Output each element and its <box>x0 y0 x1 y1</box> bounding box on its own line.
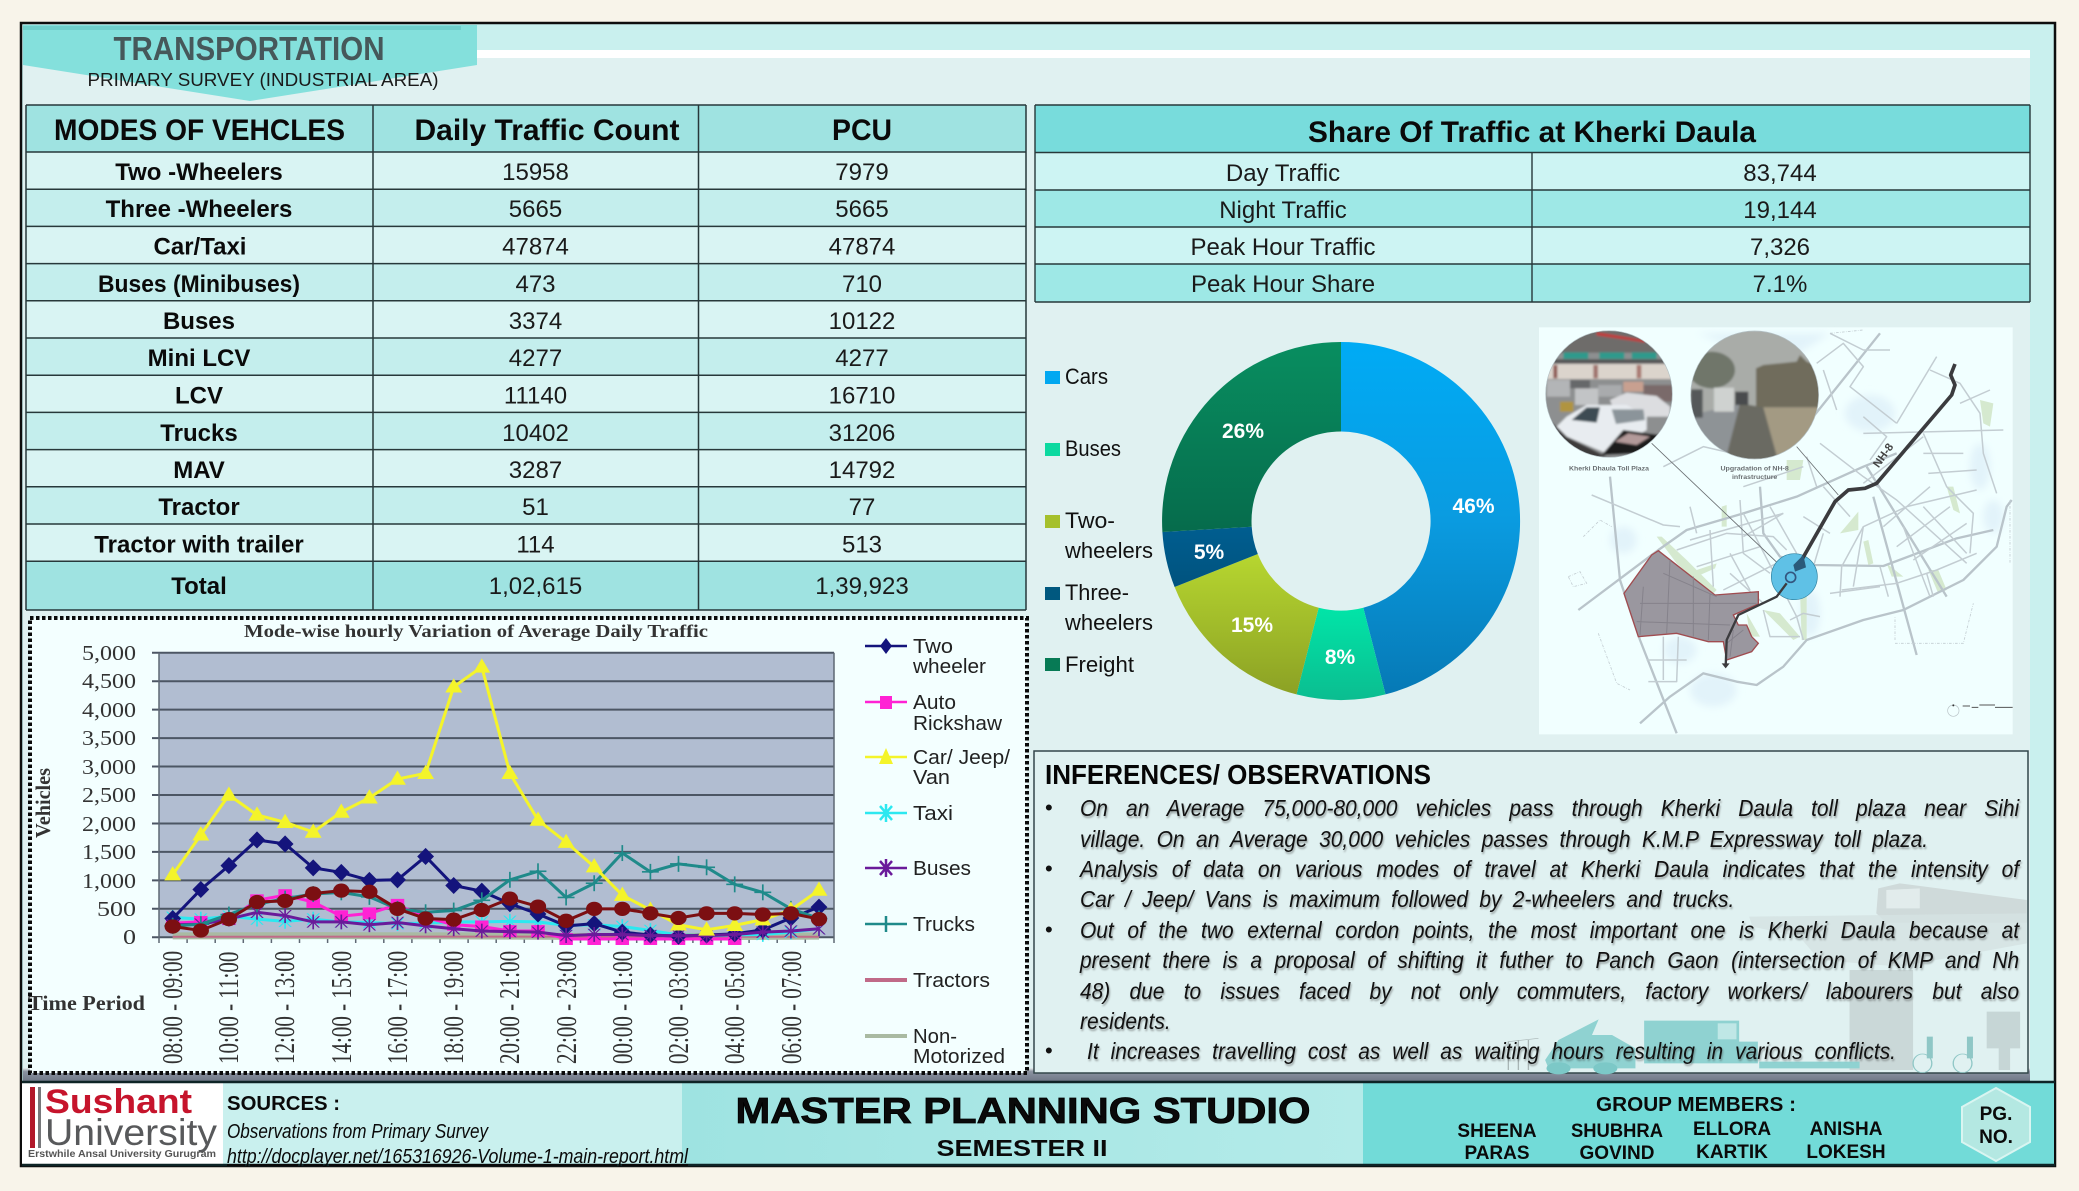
logo: Sushant University <box>28 1083 218 1160</box>
inferences heading: INFERENCES/ OBSERVATIONS <box>1045 759 1431 790</box>
group members: SHUBHRA <box>1571 1121 1663 1142</box>
chart legend: Tractors <box>913 970 990 992</box>
table data rows: Car/Taxi <box>154 234 246 260</box>
line chart panel <box>28 618 1027 1073</box>
heading: TRANSPORTATION: TRANSPORTATION <box>114 30 384 67</box>
road network <box>1578 333 2012 733</box>
boundary dash lines <box>1568 330 2010 690</box>
photo captions: infrastructure <box>1732 474 1778 481</box>
y axis labels: 2,500 <box>82 783 136 807</box>
group members: ELLORA <box>1693 1119 1771 1140</box>
studio title: SEMESTER II <box>936 1135 1108 1161</box>
table data rows: Buses (Minibuses) <box>98 271 300 298</box>
table data rows: 5665 <box>835 196 889 223</box>
location map <box>1539 327 2013 734</box>
table data rows: Trucks <box>160 420 238 447</box>
x axis labels: 04:00 - 05:00 <box>720 951 751 1064</box>
table data rows: 10402 <box>502 420 569 447</box>
x axis labels: 06:00 - 07:00 <box>777 951 808 1064</box>
sources: Observations from Primary Survey <box>227 1121 489 1143</box>
donut value labels: 5% <box>1194 541 1224 564</box>
page number badge: NO. <box>1979 1127 2013 1148</box>
inferences bullet text: present there is a proposal of shifting it futher to Panch Gaon (intersection of KMP and Nh <box>1080 947 2019 973</box>
share rows: Peak Hour Traffic <box>1191 234 1375 261</box>
logo: Sushant University: University <box>45 1112 218 1153</box>
chart legend: Non- <box>913 1026 957 1048</box>
table data rows: 7979 <box>835 159 889 186</box>
donut value labels <box>1194 420 1495 669</box>
table title: Share Of Traffic at Kherki Daula <box>1308 116 1756 149</box>
chart legend: Van <box>913 767 950 789</box>
table data rows: Three -Wheelers <box>106 196 292 223</box>
title banner <box>23 25 477 101</box>
photo: NH-8 upgradation <box>1688 330 1823 463</box>
chart title: Mode-wise hourly Variation of Average Daily Traffic <box>244 621 708 641</box>
table data rows: 14792 <box>829 457 895 484</box>
table header row: MODES OF VEHCLES <box>54 114 345 147</box>
table data rows: 77 <box>849 494 875 521</box>
donut value labels: 26% <box>1222 420 1264 443</box>
table header row: PCU <box>832 114 892 147</box>
table data rows: 10122 <box>829 308 895 335</box>
table header row <box>54 114 892 147</box>
chart legend: Two <box>913 636 953 658</box>
chart legend <box>865 636 1010 1068</box>
sources: http://docplayer.net/165316926-Volume-1-main-report.html <box>227 1146 688 1168</box>
background transport silhouettes <box>1508 883 2027 1074</box>
table data rows: LCV <box>175 382 223 410</box>
table data rows: Buses <box>163 308 235 335</box>
x axis labels: 22:00 - 23:00 <box>552 951 583 1064</box>
group members: LOKESH <box>1806 1142 1886 1163</box>
chart legend: wheeler <box>912 656 986 678</box>
highway NH-8: NH-8 <box>1871 442 1896 470</box>
donut chart legend <box>1045 364 1153 677</box>
x axis labels: 02:00 - 03:00 <box>664 951 695 1064</box>
table data rows: Two -Wheelers <box>115 159 283 186</box>
logo: Sushant University: Erstwhile Ansal University Gurugram <box>28 1149 216 1160</box>
inferences bullet text: Analysis of data on various modes of travel at Kherki Daula indicates that the intensity of <box>1080 856 2019 882</box>
y axis labels: 1,500 <box>82 840 136 864</box>
table: modes of vehicles <box>26 105 1026 610</box>
group members: GOVIND <box>1580 1143 1654 1164</box>
y axis labels: 4,000 <box>82 698 136 722</box>
location circle marker <box>1771 554 1817 600</box>
table data rows: Mini LCV <box>148 345 250 372</box>
sources: SOURCES : <box>227 1093 340 1115</box>
x axis labels: 12:00 - 13:00 <box>270 951 301 1064</box>
table data rows: 11140 <box>504 382 567 410</box>
studio title: MASTER PLANNING STUDIO <box>736 1090 1310 1131</box>
table data rows: Total <box>171 573 227 600</box>
photo: toll plaza <box>1543 330 1677 460</box>
x axis labels <box>158 951 808 1064</box>
table data rows: 51 <box>522 494 549 521</box>
table data rows: 4277 <box>835 345 889 372</box>
group members: SHEENA <box>1457 1121 1537 1142</box>
chart legend: Taxi <box>913 803 953 825</box>
table data rows: 1,02,615 <box>489 573 582 600</box>
table data rows: 1,39,923 <box>815 573 909 600</box>
table data rows: MAV <box>173 457 225 484</box>
y axis labels: 3,000 <box>82 755 136 779</box>
x axis labels: 08:00 - 09:00 <box>158 951 189 1064</box>
x axis labels: 10:00 - 11:00 <box>214 952 245 1064</box>
photo outlines <box>1546 331 1819 459</box>
inferences bullet text: • <box>1045 917 1053 942</box>
group members: PARAS <box>1464 1143 1530 1164</box>
chart legend: Trucks <box>913 914 975 936</box>
inferences bullet text: • <box>1045 795 1053 820</box>
table data rows: 3287 <box>509 457 562 484</box>
table data rows: 31206 <box>829 420 895 447</box>
donut value labels: 15% <box>1231 614 1273 637</box>
group members: KARTIK <box>1696 1142 1768 1163</box>
share rows: 7,326 <box>1750 234 1810 261</box>
inferences bullet text: 48) due to issues faced by not only commuters, factory workers/ labourers but also <box>1080 978 2019 1004</box>
photo captions <box>1569 466 1789 481</box>
green patches <box>1657 400 1993 640</box>
table data rows: 5665 <box>509 196 562 223</box>
y axis labels: 3,500 <box>82 726 136 750</box>
page number badge <box>1962 1088 2030 1161</box>
photo captions: Kherki Dhaula Toll Plaza <box>1569 466 1650 473</box>
chart legend: Buses <box>913 858 971 880</box>
group members: GROUP MEMBERS : <box>1596 1094 1796 1116</box>
share rows: Peak Hour Share <box>1191 271 1375 298</box>
inferences bullet text: • <box>1045 856 1053 881</box>
inferences panel <box>1034 751 2028 1074</box>
x axis labels: 00:00 - 01:00 <box>608 951 639 1064</box>
table header row: Daily Traffic Count <box>414 114 680 147</box>
table data rows: 16710 <box>829 382 895 410</box>
table data rows: 114 <box>516 532 555 558</box>
share rows: Day Traffic <box>1226 160 1340 187</box>
share rows <box>1191 160 1817 298</box>
table data rows: 47874 <box>829 234 895 260</box>
table data rows: 710 <box>842 271 882 298</box>
inferences bullet text: Car / Jeep/ Vans is maximum followed by 2-wheelers and trucks. <box>1080 886 1734 912</box>
y axis labels: 4,500 <box>82 669 136 693</box>
y axis labels: 0 <box>123 925 136 949</box>
inferences bullet text: It increases travelling cost as well as waiting hours resulting in various conflicts. <box>1087 1038 1896 1064</box>
table data rows: Tractor with trailer <box>94 532 304 558</box>
toll plaza connector lines <box>1652 443 1838 572</box>
donut chart legend: Three- <box>1065 580 1129 605</box>
y axis labels: 2,000 <box>82 812 136 836</box>
group members: ANISHA <box>1810 1119 1883 1140</box>
donut chart legend: Cars <box>1065 364 1108 389</box>
sources <box>227 1093 688 1168</box>
inferences bullet text: residents. <box>1080 1008 1171 1034</box>
table data rows: Tractor <box>158 494 240 521</box>
table data rows: 15958 <box>502 159 569 186</box>
chart legend: Car/ Jeep/ <box>913 747 1010 769</box>
share rows: 7.1% <box>1753 271 1807 298</box>
x axis labels: 16:00 - 17:00 <box>383 951 414 1064</box>
donut chart legend: Buses <box>1065 436 1121 461</box>
chart series <box>173 667 819 939</box>
y axis labels: 1,000 <box>82 869 136 893</box>
table data rows: 3374 <box>509 308 562 335</box>
y axis labels: 500 <box>97 897 136 921</box>
chart legend: Rickshaw <box>913 713 1003 735</box>
table data rows: 4277 <box>509 345 562 372</box>
donut chart legend: Freight <box>1065 652 1134 677</box>
share rows: 19,144 <box>1743 197 1817 224</box>
y axis title: Vehicles <box>33 768 55 838</box>
share rows: 83,744 <box>1743 160 1817 187</box>
footer <box>22 1082 2055 1168</box>
page number badge: PG. <box>1980 1104 2012 1125</box>
inferences bullet text: On an Average 75,000-80,000 vehicles pass through Kherki Daula toll plaza near Sihi <box>1080 795 2019 821</box>
plot area <box>152 653 834 943</box>
group members <box>1457 1094 1886 1164</box>
y axis labels <box>82 641 136 949</box>
chart legend: Auto <box>913 692 956 714</box>
inferences bullet text: • <box>1045 1038 1053 1063</box>
donut chart legend: Two- <box>1065 508 1115 533</box>
table: share of traffic <box>1035 105 2030 302</box>
inferences bullet text <box>1045 795 2022 1067</box>
share rows: Night Traffic <box>1219 197 1347 224</box>
table data rows <box>94 159 909 600</box>
donut chart <box>1162 342 1520 700</box>
x axis labels: 18:00 - 19:00 <box>439 951 470 1064</box>
logo: Sushant University: Sushant <box>45 1083 192 1121</box>
x axis labels: 20:00 - 21:00 <box>495 951 526 1064</box>
studio title <box>736 1090 1310 1161</box>
x axis title: Time Period <box>28 991 145 1015</box>
table data rows: 513 <box>842 532 882 558</box>
table data rows: 47874 <box>502 234 569 260</box>
highway NH-8 <box>1722 364 1955 668</box>
chart legend: Motorized <box>913 1046 1005 1068</box>
donut chart legend: wheelers <box>1064 538 1153 563</box>
subheading: PRIMARY SURVEY (INDUSTRIAL AREA) <box>88 70 438 90</box>
inferences bullet text: Out of the two external cordon points, the most important one is Kherki Daula because at <box>1080 917 2019 943</box>
donut value labels: 8% <box>1325 646 1355 669</box>
industrial zone polygon <box>1624 551 1758 660</box>
donut value labels: 46% <box>1452 495 1495 518</box>
map scale bar <box>1948 704 2013 716</box>
table data rows: 473 <box>515 271 556 298</box>
y axis labels: 5,000 <box>82 641 136 665</box>
water patches <box>1610 333 2003 707</box>
donut chart legend: wheelers <box>1064 610 1153 635</box>
x axis labels: 14:00 - 15:00 <box>327 951 358 1064</box>
photo captions: Upgradation of NH-8 <box>1720 466 1789 473</box>
inferences bullet text: village. On an Average 30,000 vehicles passes through K.M.P Expressway toll plaza. <box>1080 826 1928 852</box>
